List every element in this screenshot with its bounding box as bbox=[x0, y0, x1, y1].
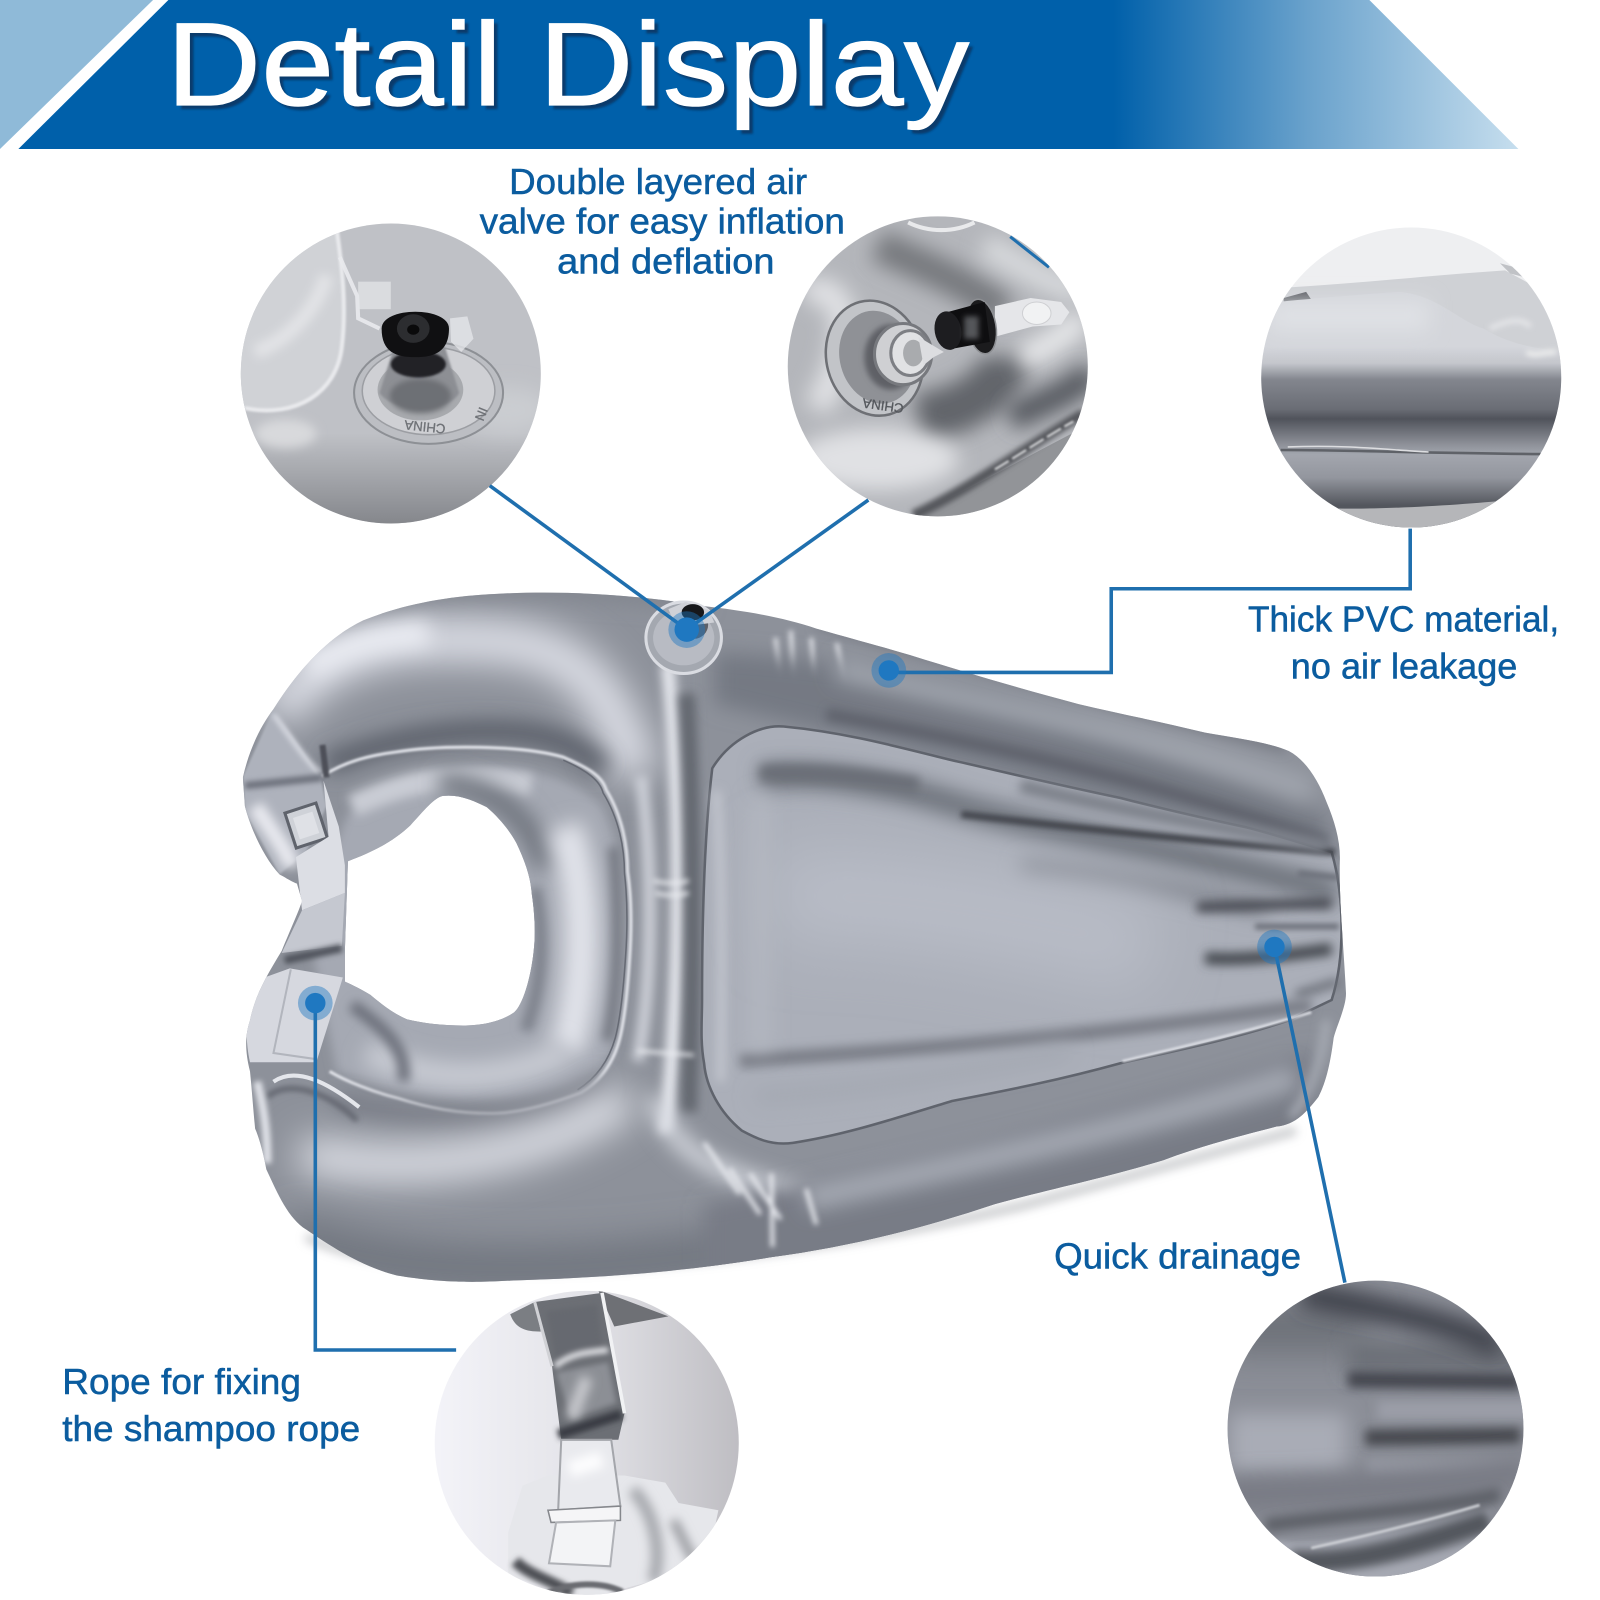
lower tube shading bbox=[337, 1082, 602, 1117]
strap bbox=[535, 1293, 624, 1440]
inner panel bbox=[702, 726, 1342, 1144]
central valley bbox=[665, 663, 678, 1133]
leader line: rope bbox=[315, 1003, 456, 1350]
label: rope: the shampoo rope bbox=[62, 1409, 360, 1449]
basin drop shadow bbox=[306, 1131, 1296, 1269]
title: Detail Display bbox=[166, 0, 969, 131]
valve base disc bbox=[354, 342, 503, 444]
valve black head bbox=[382, 312, 449, 357]
label: rope bbox=[62, 1362, 360, 1449]
strap bbox=[296, 781, 345, 910]
detail circle: valve open bbox=[781, 209, 1097, 526]
label: PVC material bbox=[1248, 600, 1559, 687]
label: PVC material: Thick PVC material, bbox=[1248, 600, 1559, 640]
valve plug bbox=[995, 298, 1069, 337]
label: air valve: and deflation bbox=[557, 241, 774, 281]
title: Detail Display bbox=[170, 3, 973, 135]
detail circle: valve closed: IN bbox=[472, 405, 491, 423]
rope tab bbox=[243, 709, 327, 874]
marker dot: valve bbox=[668, 611, 705, 648]
detail circle: valve open: CHINA bbox=[861, 395, 904, 416]
air valve on basin bbox=[646, 602, 721, 673]
header banner bbox=[0, 0, 1518, 149]
detail circle: shampoo rope bbox=[429, 1286, 745, 1600]
marker dot: rope bbox=[298, 986, 333, 1020]
upper tube shading bbox=[276, 640, 638, 776]
leader line: valve right bbox=[687, 500, 868, 630]
detail circle: valve closed bbox=[235, 219, 551, 531]
upper right tube shading bbox=[714, 653, 1327, 857]
velcro patches bbox=[558, 1440, 620, 1510]
product: inflatable shampoo basin bbox=[224, 571, 1367, 1296]
marker dot: drainage bbox=[1257, 930, 1292, 964]
leader line: valve left bbox=[490, 486, 687, 630]
lower lobe bbox=[604, 1476, 718, 1594]
wrinkles bbox=[704, 1143, 816, 1247]
leader line: PVC bbox=[889, 529, 1410, 672]
detail circle: PVC material bbox=[1255, 224, 1571, 536]
right edge folds bbox=[1291, 1020, 1327, 1117]
label: PVC material: no air leakage bbox=[1291, 647, 1517, 687]
label: quick drainage: Quick drainage bbox=[1054, 1236, 1301, 1276]
detail circle: drainage bbox=[1228, 1280, 1524, 1576]
banner blue band bbox=[18, 0, 1518, 149]
leader line: drainage bbox=[1274, 947, 1345, 1283]
panel folds bbox=[760, 776, 1337, 893]
label: air valve: Double layered air bbox=[509, 162, 807, 202]
basin body bbox=[224, 571, 1367, 1296]
detail circle: valve closed: CHINA bbox=[404, 417, 446, 436]
label: air valve: valve for easy inflation bbox=[480, 202, 845, 242]
valve disc bbox=[824, 299, 923, 417]
D ring around hole bbox=[306, 768, 626, 1100]
buckle bbox=[285, 803, 327, 848]
valve tabs bbox=[340, 257, 380, 329]
label: air valve bbox=[480, 162, 845, 281]
marker dot: PVC bbox=[871, 653, 906, 688]
label: rope: Rope for fixing bbox=[62, 1362, 301, 1402]
banner corner triangle bbox=[0, 0, 153, 149]
